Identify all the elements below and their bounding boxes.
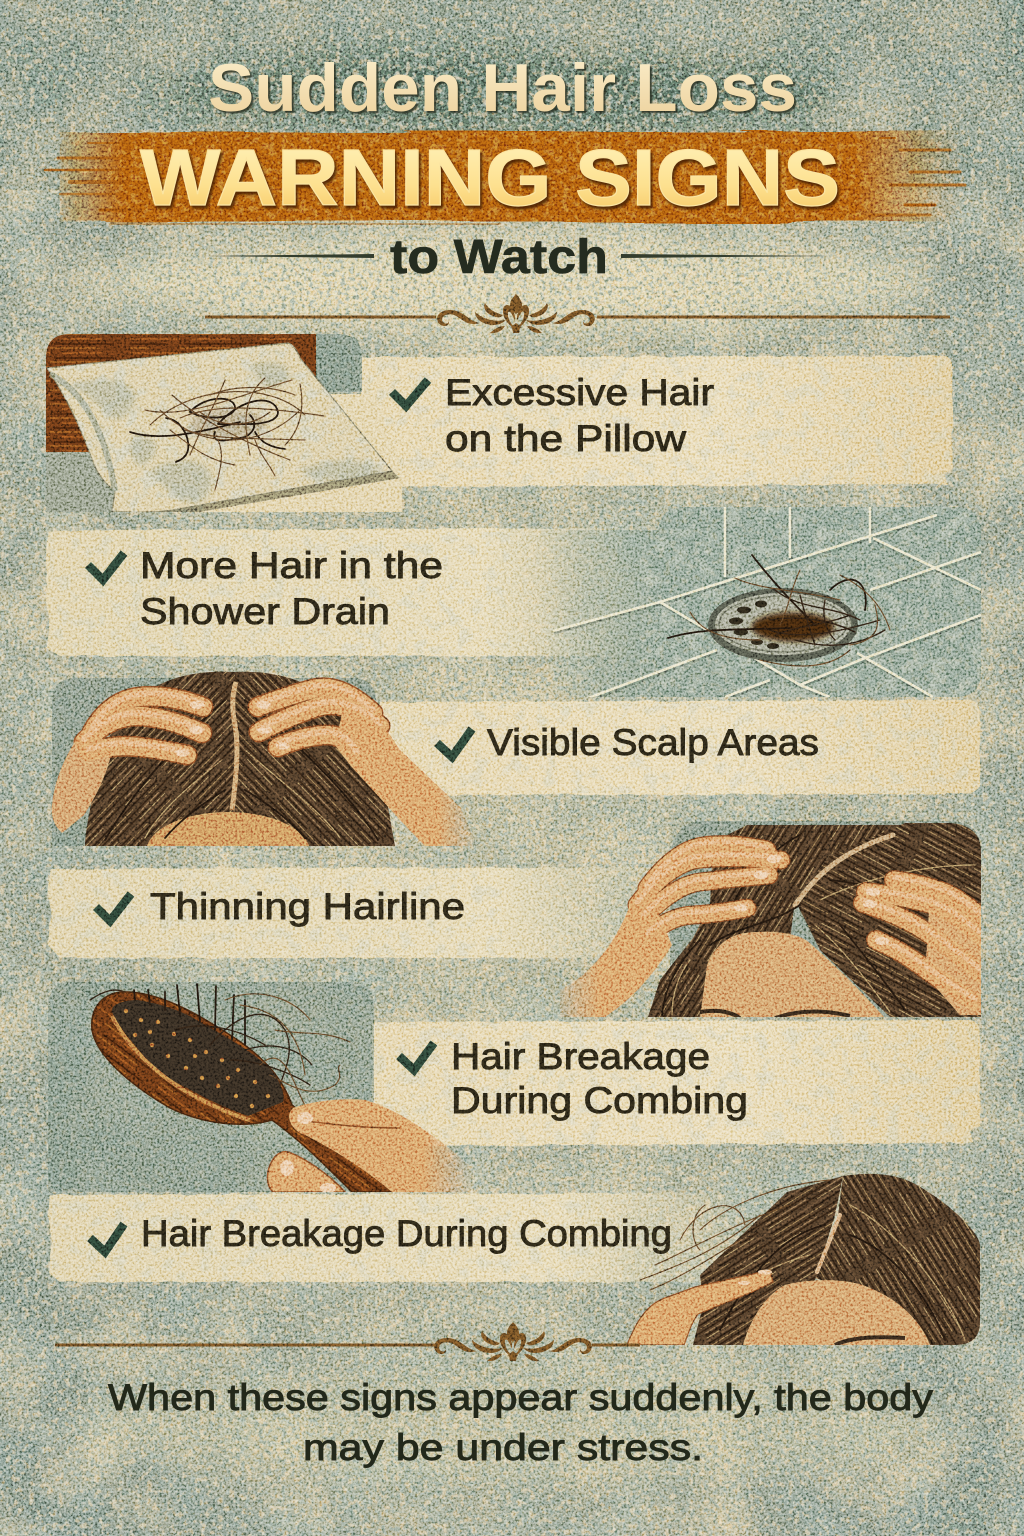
left hand bbox=[52, 693, 204, 833]
flyaway hairs bbox=[640, 1180, 830, 1290]
heading: WARNING SIGNS: WARNING SIGNS bbox=[140, 133, 840, 222]
label: Excessive Hair bbox=[445, 372, 714, 413]
check mark bbox=[392, 380, 428, 406]
heading rules bbox=[203, 254, 835, 258]
check mark bbox=[399, 1043, 434, 1070]
label: Hair Breakage bbox=[451, 1036, 710, 1077]
hand bbox=[289, 1099, 475, 1192]
right hand bbox=[863, 877, 990, 1015]
illustration: hair at forehead bbox=[627, 1174, 980, 1345]
label: Thinning Hairline bbox=[150, 886, 465, 927]
label: During Combing bbox=[451, 1080, 748, 1121]
panel: hair breakage during combing (head) bbox=[48, 1174, 980, 1345]
right hand bbox=[257, 685, 478, 846]
brush stroke banner bbox=[45, 132, 965, 224]
hand bbox=[627, 1270, 773, 1345]
closing statement: When these signs appear suddenly, the body bbox=[108, 1377, 934, 1418]
illustration: hair on pillow bbox=[46, 334, 402, 516]
illustration: hands at hairline bbox=[560, 821, 990, 1018]
label: on the Pillow bbox=[445, 418, 686, 459]
panel: hair breakage during combing (brush) bbox=[48, 982, 980, 1193]
banner: visible scalp areas bbox=[380, 700, 980, 795]
panel: more hair in the shower drain bbox=[46, 505, 985, 702]
panel: excessive hair on the pillow bbox=[46, 334, 953, 516]
label: Shower Drain bbox=[140, 591, 390, 632]
label: Hair Breakage During Combing bbox=[141, 1213, 672, 1254]
illustration: hands parting hair bbox=[52, 672, 474, 846]
heading: to Watch: to Watch bbox=[390, 231, 608, 284]
banner: more hair in the shower drain bbox=[46, 528, 655, 656]
closing statement: may be under stress. bbox=[303, 1427, 703, 1468]
illustration: shower drain bbox=[540, 505, 985, 702]
ornamental divider: top bbox=[205, 294, 950, 333]
check mark bbox=[437, 729, 472, 757]
banner: thinning hairline bbox=[48, 867, 670, 958]
check mark bbox=[90, 1224, 124, 1252]
check mark bbox=[88, 553, 124, 580]
panel: thinning hairline bbox=[48, 821, 990, 1018]
banner: excessive hair on the pillow bbox=[360, 356, 953, 487]
left hand bbox=[560, 842, 781, 1017]
label: More Hair in the bbox=[140, 545, 443, 586]
panel: visible scalp areas bbox=[52, 672, 980, 892]
check mark bbox=[96, 894, 131, 921]
label: Visible Scalp Areas bbox=[487, 722, 819, 763]
banner: hair breakage during combing 1 bbox=[372, 1020, 980, 1146]
title block bbox=[140, 50, 840, 284]
illustration: hairbrush bbox=[48, 982, 475, 1193]
title: Sudden Hair Loss: Sudden Hair Loss bbox=[208, 50, 797, 126]
ornamental divider: bottom bbox=[55, 1322, 640, 1361]
banner: hair breakage during combing 2 bbox=[48, 1193, 760, 1282]
